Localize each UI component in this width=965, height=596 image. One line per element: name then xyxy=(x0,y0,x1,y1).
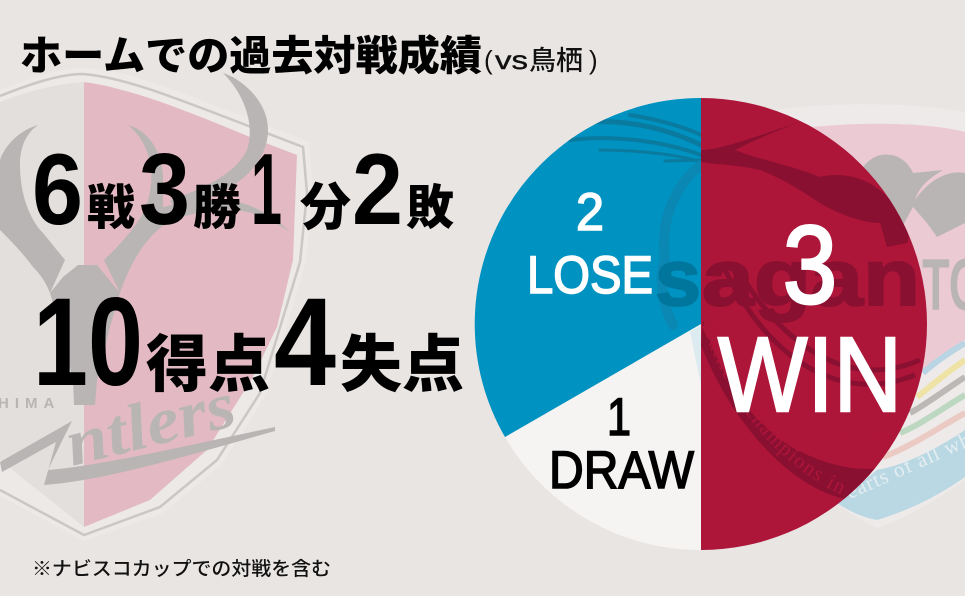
title suffix: vs xyxy=(495,45,528,75)
crest lettering: Antlers: ntlers xyxy=(58,368,243,481)
sagan wordmark in pie: agan xyxy=(702,233,920,322)
watermark in blue slice xyxy=(570,115,701,325)
left antler xyxy=(0,125,65,293)
upper antler xyxy=(170,73,268,210)
record summary: 6 xyxy=(32,134,83,246)
title suffix: 鳥栖 xyxy=(529,46,583,76)
goals summary: 失点 xyxy=(340,331,464,400)
record summary: 2 xyxy=(352,134,403,246)
pie slice: lose xyxy=(475,98,701,437)
pie label: draw: 1 xyxy=(607,388,631,447)
record summary xyxy=(32,134,454,246)
crest colour stripes xyxy=(883,343,965,457)
footnote: ※ナビスコカップでの対戦を含む xyxy=(32,558,331,580)
right antler xyxy=(104,125,290,293)
title: ホームでの過去対戦成績 xyxy=(20,33,482,79)
pie slice: draw xyxy=(505,324,701,550)
title suffix: ) xyxy=(589,45,598,75)
sagan wordmark in pie: s xyxy=(655,233,701,322)
Sagan Tosu watermark crest xyxy=(690,104,965,528)
title suffix xyxy=(484,45,598,76)
pie label: draw: DRAW xyxy=(549,441,694,500)
crest bird xyxy=(863,155,965,240)
record summary: 分 xyxy=(300,179,351,236)
pie label: lose xyxy=(527,183,653,305)
pie label: lose: LOSE xyxy=(527,246,653,305)
record summary: 敗 xyxy=(406,182,454,235)
watermark in red slice xyxy=(701,123,921,499)
goals summary: 10 xyxy=(33,273,143,412)
watermark in draw slice xyxy=(690,325,701,385)
crest script swoosh xyxy=(0,421,275,485)
pie slice: win xyxy=(701,98,927,550)
sagan wordmark in pie xyxy=(656,261,916,323)
pie label: win xyxy=(718,204,902,434)
goals summary: 4 xyxy=(274,273,336,412)
goals summary: 得点 xyxy=(146,331,270,400)
title suffix: ( xyxy=(484,45,493,75)
record summary: 3 xyxy=(139,134,190,246)
centre shaft xyxy=(50,265,120,405)
pie label: draw xyxy=(549,388,694,500)
pie label: win: 3 xyxy=(783,204,837,327)
pie chart xyxy=(474,98,927,550)
crest blue band xyxy=(837,430,965,520)
pie label: lose: 2 xyxy=(576,183,604,242)
record summary: 勝 xyxy=(193,182,241,235)
Kashima Antlers watermark crest xyxy=(0,68,313,541)
record summary: 戦 xyxy=(87,182,135,235)
record summary: 1 xyxy=(251,134,282,246)
pie label: win: WIN xyxy=(718,316,902,434)
goals summary xyxy=(33,273,464,412)
